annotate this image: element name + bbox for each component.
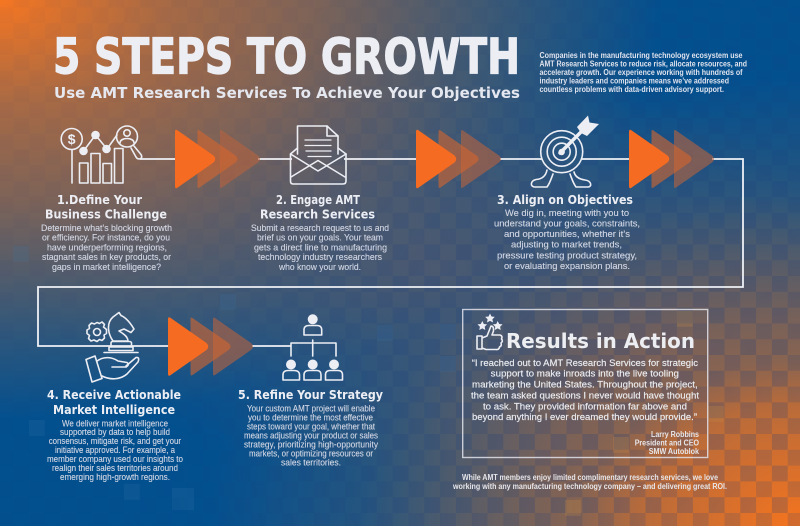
body: step 5: markets, or optimizing resources or xyxy=(249,448,373,458)
body: step 2: technology industry researchers xyxy=(258,252,382,262)
icon: org chart of people xyxy=(283,314,342,380)
testimonial quote: beyond anything I ever dreamed they would provide.” xyxy=(472,412,697,423)
body: step 5: means adjusting your product or sales xyxy=(244,430,378,440)
body: step 4: member company used our insights to xyxy=(47,454,183,464)
footer note xyxy=(452,473,727,491)
intro text xyxy=(540,51,747,94)
body: step 5: sales territories. xyxy=(281,458,341,468)
testimonial quote: the team asked questions I never would have thought xyxy=(471,390,699,401)
attribution xyxy=(635,430,699,456)
body: step 1: gaps in market intelligence? xyxy=(52,262,161,272)
body: step 4: We deliver market intelligence xyxy=(62,418,168,428)
body: step 1: have underperforming regions, xyxy=(47,242,167,252)
body: step 1: Determine what’s blocking growth xyxy=(41,223,172,233)
icon: envelope with letter xyxy=(290,126,346,184)
heading: step 4: 4. Receive Actionable xyxy=(47,388,181,402)
panel: results in action xyxy=(463,310,708,458)
panel: step 3 xyxy=(494,116,640,271)
body: step 4: consensus, mitigate risk, and get your xyxy=(49,436,181,446)
panel: step 4 xyxy=(47,312,183,482)
body: step 1: or efficiency. For instance, do you xyxy=(42,233,170,243)
body: step 3: and opportunities, whether it’s xyxy=(504,229,631,239)
body: step 4 xyxy=(47,418,183,482)
checker pattern xyxy=(393,213,800,526)
body: step 5: you to determine the most effective xyxy=(248,412,373,422)
testimonial quote: “I reached out to AMT Research Services for strategic xyxy=(472,358,698,369)
body: step 2: Submit a research request to us and xyxy=(251,223,389,233)
intro text: AMT Research Services to reduce risk, allocate resources, and xyxy=(540,60,747,68)
panel: step 1 xyxy=(41,126,172,272)
body: step 3: understand your goals, constraints, xyxy=(494,218,640,228)
body: step 2: brief us on your goals. Your team xyxy=(257,233,383,243)
heading: step 2 xyxy=(260,193,375,222)
body: step 5: Your custom AMT project will enable xyxy=(247,404,375,414)
testimonial quote: support to make inroads into the live tooling xyxy=(491,369,679,380)
heading: step 1: Business Challenge xyxy=(45,208,167,222)
heading: step 2: Research Services xyxy=(260,208,375,222)
testimonial quote: to ask. They provided information far above and xyxy=(483,401,687,412)
body: step 5 xyxy=(244,404,378,468)
heading: step 4 xyxy=(47,388,181,417)
body: step 3: pressure testing product strategy, xyxy=(497,250,637,260)
body: step 1 xyxy=(41,223,172,272)
testimonial quote: marketing the United States. Throughout the project, xyxy=(472,379,698,390)
arrows: step 4 to 5 xyxy=(168,317,253,376)
testimonial quote xyxy=(471,358,699,423)
body: step 4: initiative approved. For example, a xyxy=(55,445,175,455)
icon: chart with dollar and magnifier: $ xyxy=(68,131,76,147)
intro text: accelerate growth. Our experience working with hundreds of xyxy=(540,68,743,77)
body: step 3: adjusting to market trends, xyxy=(511,240,622,250)
icon: hand holding chess knight and gear xyxy=(86,312,139,382)
intro text: Companies in the manufacturing technology ecosystem use xyxy=(540,51,743,60)
body: step 3: or evaluating expansion plans. xyxy=(504,261,630,271)
body: step 4: realign their sales territories around xyxy=(52,463,178,473)
intro text: industry leaders and companies means we’ve addressed xyxy=(540,76,729,86)
intro text: countless problems with data-driven advisory support. xyxy=(540,85,724,94)
body: step 2: gets a direct line to manufacturing xyxy=(254,242,387,252)
body: step 2 xyxy=(251,223,389,272)
heading: step 4: Market Intelligence xyxy=(53,403,175,417)
heading: step 2: 2. Engage AMT xyxy=(276,193,361,207)
arrows: step 3 to 4 corner xyxy=(629,130,714,188)
connector line xyxy=(38,159,743,346)
body: step 3 xyxy=(494,208,640,271)
footer note: working with any manufacturing technology company – and delivering great ROI. xyxy=(452,482,727,491)
body: step 2: who know your world. xyxy=(278,262,361,272)
heading: step 3: 3. Align on Objectives xyxy=(497,193,633,207)
panel: step 5 xyxy=(238,314,383,468)
footer note: While AMT members enjoy limited complimentary research services, we love xyxy=(462,473,718,482)
body: step 4: emerging high-growth regions. xyxy=(60,472,170,482)
attribution: Larry Robbins xyxy=(651,430,699,439)
attribution: SMW Autoblok xyxy=(649,447,699,456)
arrows: step 2 to 3 xyxy=(416,130,501,188)
attribution: President and CEO xyxy=(635,438,699,448)
heading: step 1 xyxy=(45,193,167,222)
icon: thumbs up with stars xyxy=(477,314,502,350)
arrows: step 1 to 2 xyxy=(175,130,260,188)
icon: target with arrow xyxy=(531,116,599,187)
body: step 5: strategy, prioritizing high-opportunity xyxy=(244,440,378,450)
icon: chart with dollar and magnifier xyxy=(61,126,142,183)
body: step 5: steps toward your goal, whether that xyxy=(247,422,375,432)
subtitle: Use AMT Research Services To Achieve Your Objectives xyxy=(54,84,520,102)
panel: step 2 xyxy=(251,126,389,272)
body: step 3: We dig in, meeting with you to xyxy=(505,208,629,218)
body: step 4: supported by data to help build xyxy=(60,427,170,437)
heading: results in action: Results in Action xyxy=(506,329,695,353)
body: step 1: stagnant sales in key products, or xyxy=(42,252,171,262)
heading: step 5: 5. Refine Your Strategy xyxy=(238,388,383,402)
heading: step 1: 1.Define Your xyxy=(57,193,142,207)
title: 5 STEPS TO GROWTH xyxy=(53,28,520,86)
